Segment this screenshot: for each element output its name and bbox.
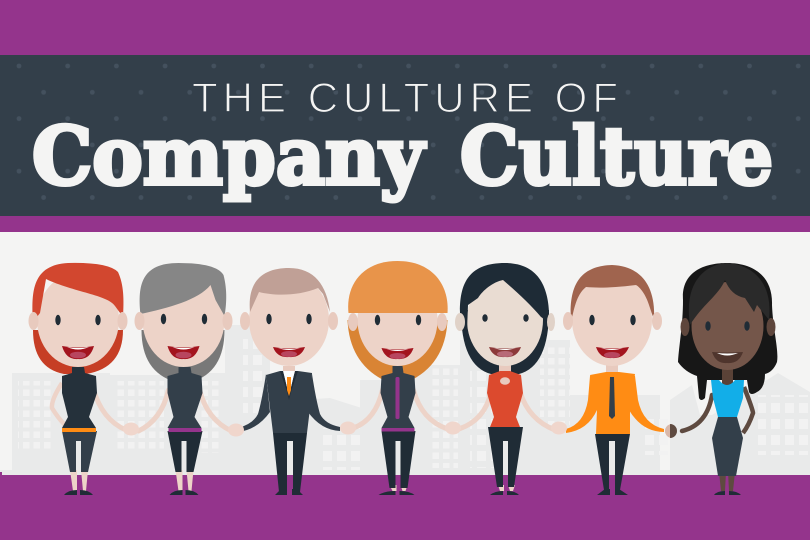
title line 2 (32, 109, 773, 203)
person 4: orange hair woman (348, 261, 448, 495)
top purple band (0, 0, 810, 55)
clasped hands (123, 422, 677, 438)
purple band below banner (0, 216, 810, 232)
title banner (0, 55, 810, 216)
ground purple band (0, 472, 810, 540)
person 7: dark skin woman in blue top (678, 263, 777, 495)
title line 2: Company (32, 109, 426, 203)
background: light canvas (0, 232, 810, 475)
person 1: red hair woman (28, 263, 128, 495)
person 2: grey hair woman (134, 263, 232, 495)
title line 2: Culture (460, 109, 773, 203)
person 3: man in suit (238, 268, 340, 495)
city skyline background (0, 325, 810, 475)
person 6: man in orange shirt (563, 265, 664, 495)
title line 1: THE CULTURE OF (192, 74, 618, 121)
person 5: black hair woman in red top (455, 263, 555, 495)
